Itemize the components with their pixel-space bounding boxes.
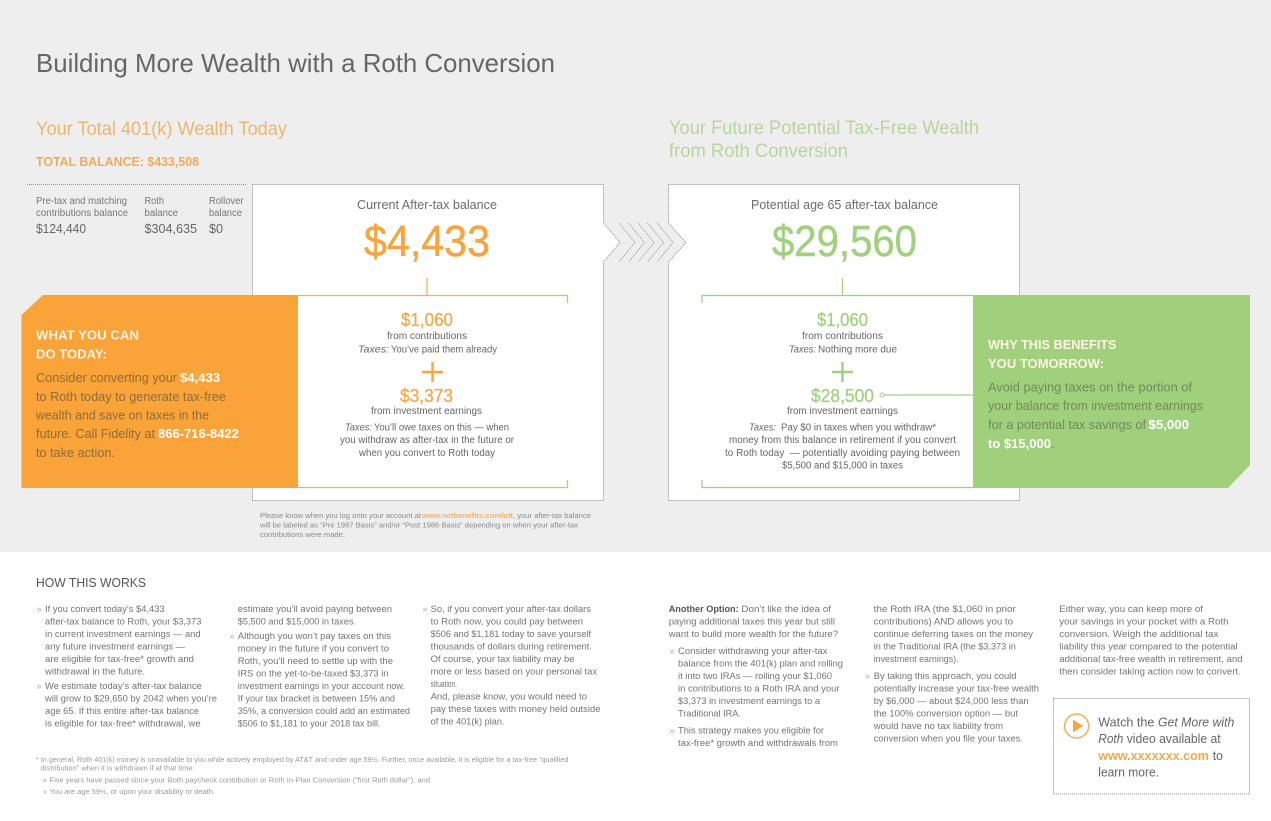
panel: why this benefits you tomorrow: to $15,000 <box>988 436 1051 451</box>
panel: why this benefits you tomorrow: $5,000 <box>1148 417 1189 432</box>
text column 5: the 100% conversion option — but <box>874 709 1018 720</box>
breakdown: contributions: $1,060 <box>401 310 453 330</box>
breakdown: contributions: from contributions <box>802 331 883 342</box>
text column 1: will grow to $29,650 by 2042 when you’re <box>44 694 217 705</box>
icon: play button <box>1065 714 1089 738</box>
breakdown: contributions: Taxes: <box>789 344 816 356</box>
text column 2: estimate you’ll avoid paying between <box>238 604 392 615</box>
panel: why this benefits you tomorrow: your balance from investment earnings <box>988 398 1203 413</box>
breakdown: earnings: Pay $0 in taxes when you withdraw* <box>781 422 936 434</box>
text column 2: Roth, you’ll need to settle up with the <box>238 656 393 667</box>
text: another option: balance from the 401(k) plan and rolling <box>678 659 843 670</box>
panel: what you can do today: to Roth today to generate tax-free <box>36 389 226 404</box>
text column 2: » <box>230 631 235 641</box>
text column 3: more or less based on your personal tax <box>431 667 597 678</box>
stat: rollover balance <box>209 196 244 236</box>
footnote: » <box>43 787 47 796</box>
text column 1: are eligible for tax-free* growth and <box>45 654 194 665</box>
total balance: TOTAL BALANCE: $433,508 <box>36 155 199 169</box>
text column 5: By taking this approach, you could <box>874 671 1016 682</box>
connector to benefits panel <box>880 393 973 397</box>
text: another option: Traditional IRA. <box>678 709 741 720</box>
panel: what you can do today: wealth and save on taxes in the <box>35 408 209 422</box>
breakdown: earnings: $5,500 and $15,000 in taxes <box>782 460 903 472</box>
panel: what you can do today: $4,433 <box>180 370 220 385</box>
footnote: Five years have passed since your Roth paycheck contribution or Roth In-Plan Conversion (“first Roth dollar”), and <box>50 776 430 785</box>
text column 5 <box>865 604 1039 745</box>
text: another option: paying additional taxes this year but still <box>669 617 835 628</box>
text: another option: Don’t like the idea of <box>741 604 831 615</box>
stat: pre-tax balance: contributions balance <box>36 208 128 219</box>
caption: current balance: Current After-tax balance <box>357 197 497 212</box>
text column 1: any future investment earnings — <box>45 642 185 653</box>
text column 3: situation. <box>431 679 457 690</box>
text: another option: in contributions to a Roth IRA and your <box>678 684 840 694</box>
breakdown: earnings: money from this balance in retirement if you convert <box>729 435 956 446</box>
panel: what you can do today: 866-716-8422 <box>158 426 239 441</box>
text column 3: pay these taxes with money held outside <box>431 704 600 715</box>
arrow: chevrons <box>619 223 673 262</box>
text column 5: contributions) AND allows you to <box>874 617 1013 628</box>
panel: why this benefits you tomorrow: YOU TOMORROW: <box>988 356 1104 371</box>
note: netbenefits: contributions were made. <box>260 530 345 539</box>
text column 3: thousands of dollars during retirement. <box>431 642 592 653</box>
text column 6: your savings in your pocket with a Roth <box>1059 617 1229 628</box>
heading: future tax-free wealth: Your Future Potential Tax-Free Wealth <box>669 117 979 139</box>
text column 1: after-tax balance to Roth, your $3,373 <box>45 617 201 628</box>
text column 2: investment earnings in your account now. <box>238 681 405 692</box>
icon: plus <box>832 362 853 382</box>
panel: what you can do today: to take action. <box>36 445 115 460</box>
text column 6: Either way, you can keep more of <box>1059 604 1203 615</box>
note: netbenefits: Please know when you log onto your account at <box>260 511 422 520</box>
text column 2: 35%, a conversion could add an estimated <box>238 706 410 717</box>
figure: $4,433: $4,433 <box>364 217 490 266</box>
figure: $29,560: $29,560 <box>772 217 917 266</box>
stat: pre-tax balance: Pre-tax and matching <box>36 196 127 207</box>
text column 2: $506 to $1,181 to your 2018 tax bill. <box>238 719 380 730</box>
panel: why this benefits you tomorrow <box>973 295 1250 488</box>
callout: watch video: Roth <box>1098 732 1123 746</box>
text column 2: If your tax bracket is between 15% and <box>238 694 395 705</box>
text: another option: » <box>670 726 675 736</box>
text column 2 <box>230 604 410 730</box>
text column 1: » <box>36 681 42 691</box>
footnote: You are age 59½, or upon your disability or death. <box>50 787 215 796</box>
text column 3: Of course, your tax liability may be <box>431 654 574 665</box>
panel: what you can do today: DO TODAY: <box>36 346 107 362</box>
breakdown: earnings: to Roth today — potentially avoiding paying between <box>725 448 960 459</box>
heading: total 401(k) wealth today: Your Total 401(k) Wealth Today <box>36 118 287 140</box>
text: another option: Another Option: <box>669 604 739 615</box>
text column 3: of the 401(k) plan. <box>431 716 504 728</box>
stat: Roth balance: $304,635 <box>144 221 197 236</box>
text column 5: would have no tax liability from <box>873 721 1003 732</box>
breakdown: earnings: Taxes: <box>749 422 776 434</box>
breakdown: earnings: $28,500 <box>811 386 874 406</box>
note: netbenefits: will be labeled as “Pre 1987 Basis” and/or “Post 1986 Basis” depending on when your after-tax <box>259 520 578 530</box>
breakdown: contributions: Taxes: <box>358 344 389 356</box>
text: another option <box>668 604 843 749</box>
callout: watch video: Get More with <box>1158 716 1234 730</box>
heading: how this works: HOW THIS WORKS <box>36 576 146 590</box>
stat: pre-tax balance <box>36 196 128 236</box>
text column 1 <box>36 604 217 730</box>
text column 1: in current investment earnings — and <box>45 629 201 640</box>
breakdown: contributions: You’ve paid them already <box>391 344 497 356</box>
breakdown: earnings: you withdraw as after-tax in the future or <box>340 435 515 446</box>
breakdown: contributions <box>789 310 898 356</box>
text column 5: in the Traditional IRA (the $3,373 in <box>874 642 1016 653</box>
panel: why this benefits you tomorrow: for a potential tax savings of <box>988 417 1146 432</box>
breakdown: earnings <box>725 386 960 472</box>
text column 6: additional tax-free wealth in retirement, and <box>1059 654 1243 665</box>
stat: rollover balance: $0 <box>209 221 223 236</box>
stat: pre-tax balance: $124,440 <box>36 221 86 236</box>
text column 5: » <box>865 671 870 681</box>
callout: watch video: Watch the <box>1098 716 1154 730</box>
breakdown: earnings: from investment earnings <box>371 406 482 417</box>
breakdown: earnings <box>340 386 515 459</box>
text: another option: Consider withdrawing your after-tax <box>678 646 828 657</box>
text column 3: to Roth now, you could pay between <box>431 617 583 628</box>
breakdown: contributions <box>358 310 497 356</box>
panel: balance breakdown <box>27 184 247 236</box>
text: another option: want to build more wealth for the future? <box>668 629 838 640</box>
panel: future after-tax balance <box>668 184 1020 500</box>
breakdown: contributions: from contributions <box>387 331 467 342</box>
text column 2: $5,500 and $15,000 in taxes. <box>238 617 356 628</box>
text: another option: it into two IRAs — rolling your $1,060 <box>678 671 832 682</box>
breakdown: earnings: from investment earnings <box>787 406 898 417</box>
panel: why this benefits you tomorrow: . <box>1051 436 1055 451</box>
panel: why this benefits you tomorrow: WHY THIS BENEFITS <box>988 337 1117 352</box>
text column 3: $506 and $1,181 today to save yourself <box>431 629 591 640</box>
breakdown: contributions: Nothing more due <box>818 344 898 356</box>
text column 3: » <box>422 604 428 614</box>
breakdown: earnings: when you convert to Roth today <box>358 448 495 459</box>
heading: future tax-free wealth <box>669 117 979 162</box>
panel: why this benefits you tomorrow: Avoid paying taxes on the portion of <box>988 380 1192 394</box>
text column 6: liability this year compared to the potential <box>1059 642 1238 653</box>
panel: what you can do today: future. Call Fidelity at <box>36 426 155 441</box>
stat: Roth balance: Roth <box>144 196 164 207</box>
icon: plus <box>422 362 443 382</box>
text column 5: by $6,000 — about $24,000 less than <box>874 696 1029 707</box>
title: Building More Wealth with a Roth Conversion <box>36 48 555 78</box>
breakdown: contributions: $1,060 <box>817 310 868 330</box>
text column 1: If you convert today’s $4,433 <box>45 604 165 615</box>
footnote: * In general, Roth 401(k) money is unavailable to you while actively employed by AT&T and under age 59½. Further, once available, it is eligible for a tax-free “qualified <box>36 755 568 764</box>
text column 5: conversion when you file your taxes. <box>874 734 1023 745</box>
heading: future tax-free wealth: from Roth Conversion <box>669 140 848 162</box>
text column 6: then consider taking action now to convert. <box>1059 667 1241 678</box>
text: another option: This strategy makes you eligible for <box>678 726 825 737</box>
callout: watch video: to <box>1213 749 1223 763</box>
caption: potential balance: Potential age 65 after-tax balance <box>751 197 938 212</box>
callout: watch video <box>1054 698 1250 794</box>
breakdown: earnings: You’ll owe taxes on this — when <box>374 422 509 434</box>
stat: Roth balance: balance <box>144 208 178 219</box>
panel: what you can do today <box>22 295 298 488</box>
text column 1: withdrawal in the future. <box>44 667 145 678</box>
stat: rollover balance: Rollover <box>209 196 244 207</box>
text column 6: conversion. Weigh the additional tax <box>1059 629 1219 640</box>
text column 3: And, please know, you would need to <box>431 692 587 702</box>
text column 1: age 65. If this entire after-tax balance <box>45 706 199 717</box>
note: netbenefits: www.netbenefits.com/att <box>421 511 513 520</box>
text: another option: tax-free* growth and withdrawals from <box>678 738 838 749</box>
footnote <box>36 755 568 796</box>
breakdown: earnings: Taxes: <box>345 422 372 434</box>
text column 5: continue deferring taxes on the money <box>874 629 1033 640</box>
footnote: distribution” when it is withdrawn if at that time: <box>41 764 195 772</box>
text column 6 <box>1059 604 1243 678</box>
text column 1: is eligible for tax-free* withdrawal, we <box>45 719 201 730</box>
panel: what you can do today: WHAT YOU CAN <box>36 328 139 342</box>
text: another option: » <box>670 646 675 656</box>
callout: watch video: learn more. <box>1098 766 1159 780</box>
text column 1: We estimate today’s after-tax balance <box>45 681 202 692</box>
note: netbenefits: , your after-tax balance <box>513 511 591 520</box>
stat: rollover balance: balance <box>209 208 242 219</box>
text column 5: the Roth IRA (the $1,060 in prior <box>874 604 1017 615</box>
stat: Roth balance <box>144 196 197 236</box>
note: netbenefits <box>259 511 591 539</box>
text column 2: money in the future if you convert to <box>238 644 389 654</box>
callout: watch video: video available at <box>1127 732 1221 746</box>
panel: what you can do today: Consider converting your <box>36 370 178 385</box>
text column 2: Although you won’t pay taxes on this <box>238 631 391 642</box>
text column 5: investment earnings). <box>874 654 959 665</box>
text: another option: $3,373 in investment earnings to a <box>678 696 821 707</box>
panel: current after-tax balance <box>252 184 620 500</box>
footnote: » <box>43 776 47 785</box>
text column 2: IRS on the yet-to-be-taxed $3,373 in <box>238 668 388 680</box>
callout: watch video: www.xxxxxxx.com <box>1097 749 1209 763</box>
breakdown: earnings: $3,373 <box>400 386 453 406</box>
text column 3: So, if you convert your after-tax dollars <box>431 604 591 615</box>
text column 5: potentially increase your tax-free wealth <box>874 684 1039 694</box>
text column 3 <box>422 604 600 728</box>
text column 1: » <box>36 604 42 614</box>
